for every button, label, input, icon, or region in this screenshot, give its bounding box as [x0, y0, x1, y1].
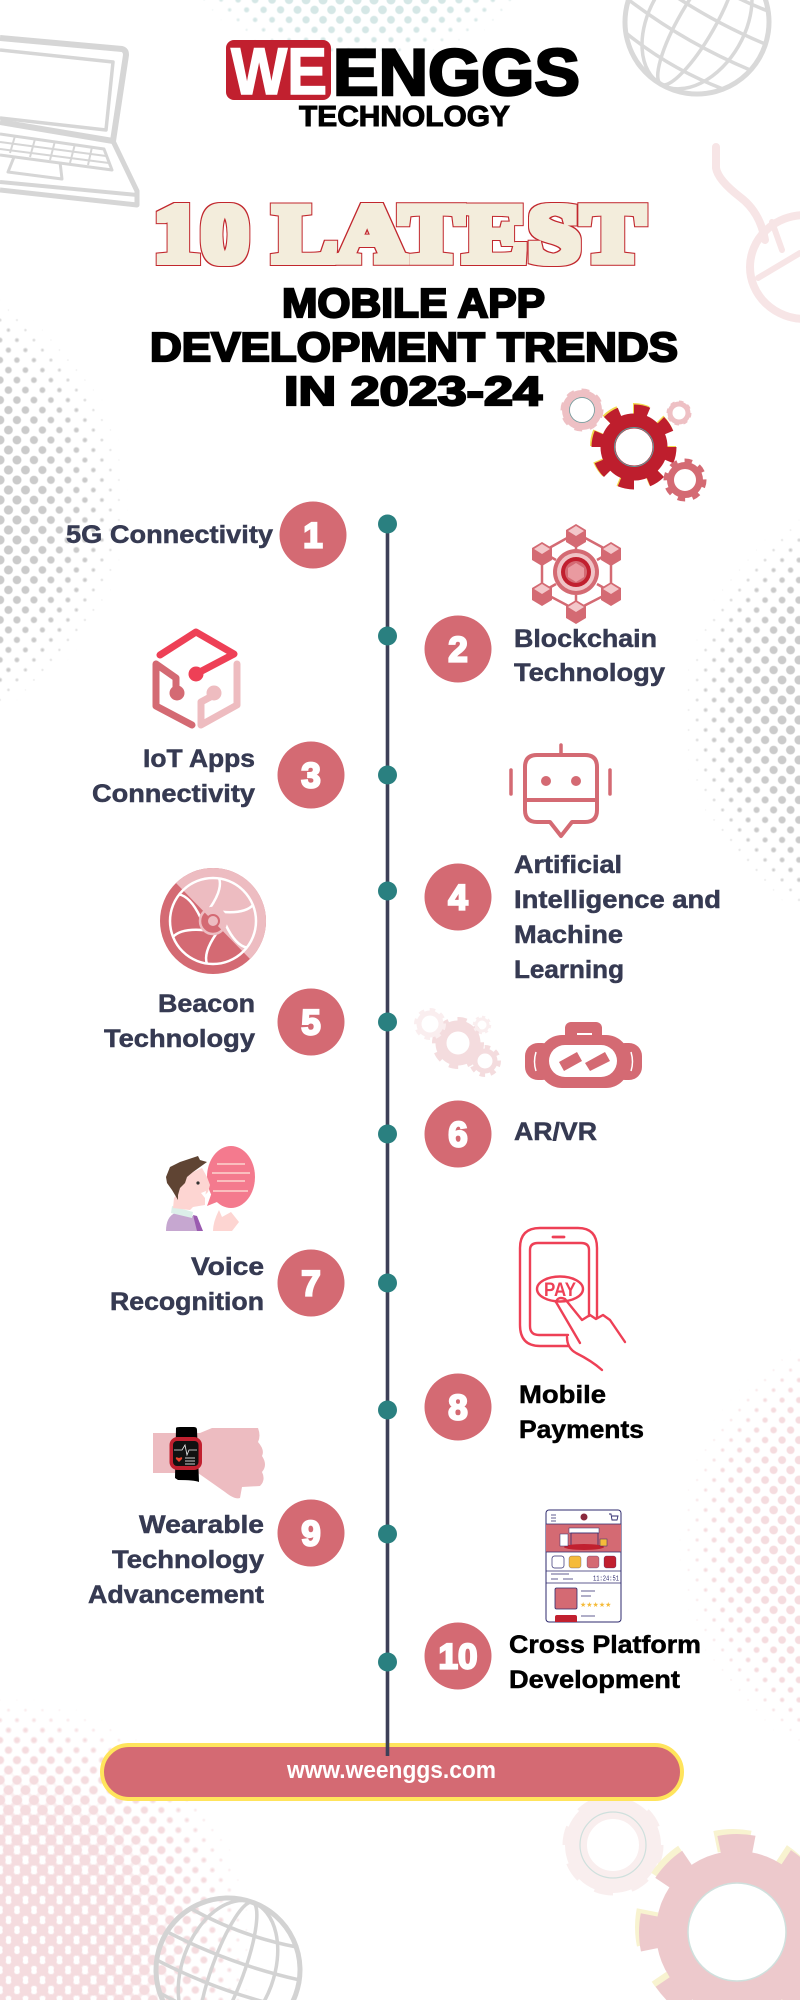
speech bubble — [207, 1146, 255, 1208]
gear cluster — [563, 391, 704, 499]
item 2: Blockchain Technology: Technology — [514, 659, 665, 687]
item 7: Voice Recognition: Voice — [191, 1253, 264, 1281]
title: 10 LATEST — [153, 188, 645, 279]
icon: beacon aperture — [160, 868, 266, 974]
item 4: Artificial Intelligence and Machine Learning: Learning — [514, 956, 624, 984]
item 4: Artificial Intelligence and Machine Learning: Intelligence and — [514, 886, 721, 914]
item 9: Wearable Technology Advancement: Wearable — [139, 1511, 264, 1539]
item 8: Mobile Payments: Payments — [519, 1416, 644, 1444]
item 10: Cross Platform Development: 10 — [439, 1638, 477, 1676]
subtitle: MOBILE APP — [282, 280, 545, 326]
decorative globe bottom left — [136, 1878, 320, 2000]
item 8: Mobile Payments: Mobile — [519, 1381, 606, 1409]
item 4: Artificial Intelligence and Machine Learning: Artificial — [514, 851, 622, 879]
icon: VR headset — [525, 1022, 642, 1088]
item 10: Cross Platform Development — [424, 1622, 701, 1694]
item 6: AR/VR — [424, 1100, 597, 1168]
item 1: 5G Connectivity — [66, 502, 346, 568]
item 6: AR/VR: AR/VR — [514, 1118, 597, 1146]
item 9: Wearable Technology Advancement — [88, 1500, 344, 1609]
faint gear — [568, 1800, 658, 1890]
icon: person speaking — [166, 1146, 255, 1231]
halftone: right pink — [688, 1358, 800, 1740]
item 4: Artificial Intelligence and Machine Learning — [424, 851, 721, 984]
item 6: AR/VR: 6 — [448, 1116, 468, 1154]
halftone: top teal — [204, 0, 512, 60]
salmon gear — [666, 461, 704, 499]
item 2: Blockchain Technology: 2 — [448, 630, 468, 670]
item 3: IoT Apps Connectivity: IoT Apps — [143, 745, 255, 773]
icon: app screen — [546, 1510, 621, 1622]
item 1: 5G Connectivity: 5G Connectivity — [66, 521, 273, 549]
item 5: Beacon Technology: Beacon — [158, 990, 255, 1018]
icon: mobile pay: PAY — [544, 1280, 576, 1301]
item 3: IoT Apps Connectivity — [92, 742, 344, 808]
subtitle: IN 2023-24 — [284, 368, 542, 414]
logo word: ENGGS: ENGGS — [333, 35, 580, 109]
subtitle — [150, 280, 678, 414]
item 1: 5G Connectivity: 1 — [303, 516, 323, 556]
item 7: Voice Recognition: 7 — [301, 1264, 321, 1304]
item 7: Voice Recognition — [110, 1250, 344, 1316]
decorative laptop — [0, 38, 137, 205]
item 7: Voice Recognition: Recognition — [110, 1288, 264, 1316]
face — [173, 1168, 210, 1210]
pink gear — [563, 391, 601, 429]
item 5: Beacon Technology: 5 — [301, 1004, 321, 1042]
small pink gear — [668, 402, 690, 424]
item 9: Wearable Technology Advancement: 9 — [301, 1514, 321, 1554]
big pink gear — [646, 1840, 800, 2000]
halftone: right grey — [688, 530, 800, 901]
halftone: left grey — [0, 310, 120, 701]
logo — [226, 34, 580, 133]
item 3: IoT Apps Connectivity: Connectivity — [92, 780, 255, 808]
icon: mobile pay — [520, 1228, 625, 1370]
item 9: Wearable Technology Advancement: Technology — [112, 1546, 264, 1574]
icon: app screen: ★★★★★ — [580, 1601, 611, 1609]
item 5: Beacon Technology — [104, 988, 344, 1056]
timeline — [378, 514, 397, 1756]
halftone: bottom left pink — [0, 1708, 247, 2000]
logo word: TECHNOLOGY: TECHNOLOGY — [299, 101, 510, 133]
item 9: Wearable Technology Advancement: Advancement — [88, 1581, 265, 1609]
item 4: Artificial Intelligence and Machine Learning: 4 — [448, 878, 468, 918]
bottom decorative gears — [568, 1800, 800, 2000]
icon: app screen: 11:24:51 — [593, 1576, 619, 1584]
icon: wearable watch — [153, 1427, 265, 1498]
decorative mouse — [716, 147, 800, 319]
hair — [166, 1156, 207, 1200]
item 5: Beacon Technology: Technology — [104, 1025, 255, 1053]
item 2: Blockchain Technology: Blockchain — [514, 625, 657, 653]
faded gears — [416, 1010, 499, 1075]
website bar: www.weenggs.com — [286, 1757, 496, 1784]
item 2: Blockchain Technology — [424, 616, 665, 687]
hand — [213, 1210, 239, 1231]
item 8: Mobile Payments: 8 — [448, 1388, 468, 1428]
shirt — [166, 1213, 203, 1231]
icon: IoT cube — [156, 632, 237, 725]
item 10: Cross Platform Development: Development — [509, 1666, 681, 1694]
item 4: Artificial Intelligence and Machine Learning: Machine — [514, 921, 623, 949]
red main gear — [596, 409, 671, 484]
item 8: Mobile Payments — [424, 1374, 644, 1444]
icon: robot — [511, 745, 610, 836]
logo mark: WE: WE — [231, 34, 327, 108]
website bar — [102, 1745, 682, 1799]
item 3: IoT Apps Connectivity: 3 — [301, 756, 321, 796]
icon: blockchain — [532, 524, 621, 624]
item 10: Cross Platform Development: Cross Platform — [509, 1631, 701, 1659]
decorative globe top right — [599, 0, 795, 120]
subtitle: DEVELOPMENT TRENDS — [150, 324, 678, 370]
